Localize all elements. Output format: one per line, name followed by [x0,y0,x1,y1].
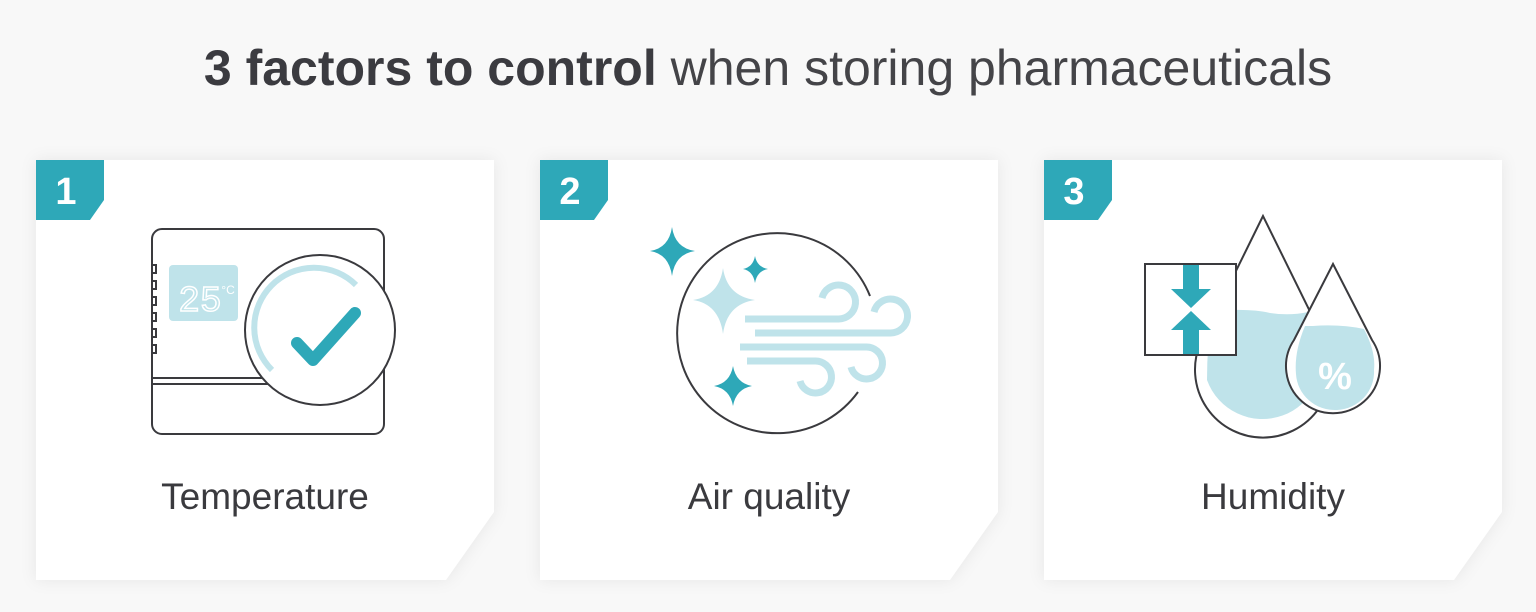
card background [540,160,998,580]
title: 3 factors to control when storing pharmaceuticals [204,40,1332,96]
panel: air quality [540,160,998,580]
label: Temperature: Temperature [161,476,369,517]
icon: drops [1145,216,1380,438]
badge 3 [1044,160,1112,220]
icon: wind and sparkles [650,227,908,433]
badge 2 [540,160,608,220]
icon: thermostat [152,229,395,434]
icon: drops: % [1318,356,1352,398]
label: Humidity: Humidity [1201,476,1345,517]
badge 3: 3 [1063,171,1085,213]
panel: humidity [1044,160,1502,580]
panel: temperature [36,160,494,580]
label: Air quality: Air quality [688,476,850,517]
icon: thermostat: °C [221,283,235,297]
badge 2: 2 [559,171,581,213]
icon: thermostat: 25 [178,281,222,322]
card background [36,160,494,580]
card background [1044,160,1502,580]
badge 1: 1 [55,171,77,213]
badge 1 [36,160,104,220]
